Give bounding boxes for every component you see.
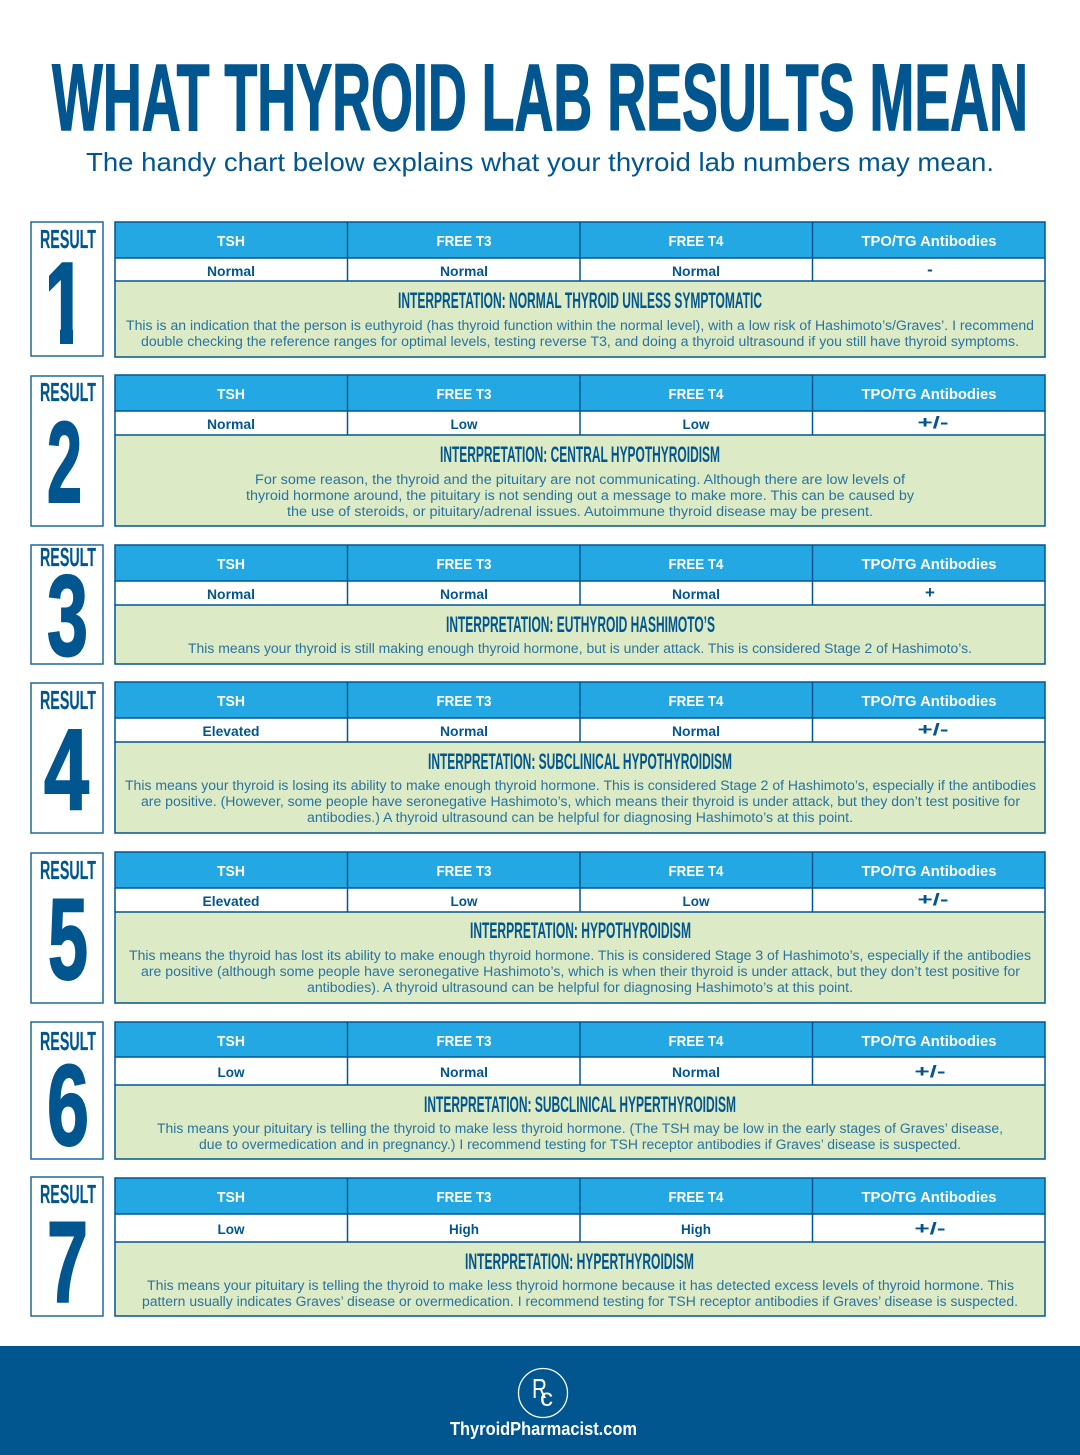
result 5 label: RESULT [40,855,96,885]
result 5 values row [115,888,1045,912]
result 5 header row: TPO/TG Antibodies [862,863,996,880]
result 6 header row: FREE T3 [436,1033,492,1050]
panel: result 4 [31,682,1045,834]
result 2 label: RESULT [40,377,96,407]
result 1 header row: FREE T4 [668,233,724,250]
result 4 header row [115,682,1045,742]
result 7 values row: High [681,1221,711,1237]
result 2 header row [115,375,1045,435]
result 7 interpretation: INTERPRETATION: HYPERTHYROIDISM [465,1249,694,1274]
result 1 interpretation: This is an indication that the person is euthyroid (has thyroid function within the normal level), with a low risk of Hashimoto’s/Graves’. I recommend [126,318,1034,333]
result 5 values row: Low [450,893,478,909]
result 1 values row [115,258,1045,281]
result 2 values row: Normal [207,416,255,432]
result 7 header row: TPO/TG Antibodies [862,1189,996,1206]
result 5 interpretation: antibodies). A thyroid ultrasound can be helpful for diagnosing Hashimoto’s at this point. [307,980,853,995]
result 3 label: 3 [47,552,88,680]
result 3 interpretation [115,605,1045,664]
result 1 values row: Normal [440,263,488,279]
result 2 interpretation: the use of steroids, or pituitary/adrenal issues. Autoimmune thyroid disease may be present. [287,504,873,519]
result 5 header row: FREE T4 [668,863,724,880]
result 1 header row [115,222,1045,281]
panel: result 7 [31,1177,1045,1327]
footer [0,1346,1080,1455]
result 2 values row [115,411,1045,435]
result 2 interpretation [115,435,1045,526]
result 1 values row: Normal [207,263,255,279]
result 1 interpretation: INTERPRETATION: NORMAL THYROID UNLESS SYMPTOMATIC [398,288,762,313]
result 3 header row: FREE T3 [436,556,492,573]
result 2 values row: Low [682,416,710,432]
result 2 label [31,376,103,527]
result 5 interpretation: are positive (although some people have seronegative Hashimoto’s, which is when their thyroid is under attack, but they don’t test positive for [141,964,1021,979]
panel: result 1 [31,222,1045,368]
result 5 values row: Elevated [202,893,260,909]
result 7 values row: +/- [914,1219,946,1238]
result 7 interpretation: This means your pituitary is telling the thyroid to make less thyroid hormone because it has detected excess levels of thyroid hormone. This [147,1278,1014,1293]
result 1 interpretation: double checking the reference ranges for optimal levels, testing reverse T3, and doing a thyroid ultrasound if you still have thyroid symptoms. [141,334,1019,349]
subtitle: The handy chart below explains what your thyroid lab numbers may mean. [86,147,994,177]
result 4 values row: Elevated [202,723,260,739]
result 5 label [31,853,103,1004]
result 4 header row: TSH [217,693,245,710]
result 4 label: RESULT [40,685,96,715]
result 4 interpretation: INTERPRETATION: SUBCLINICAL HYPOTHYROIDISM [428,749,732,774]
result 6 values row: Low [218,1064,245,1080]
panel: result 2 [31,375,1045,527]
result 4 label [31,683,103,834]
result 6 values row [115,1057,1045,1085]
result 2 header row: FREE T4 [668,386,724,403]
result 6 label: 6 [47,1042,89,1170]
result 6 label: RESULT [40,1026,96,1056]
result 1 label: 1 [45,240,85,368]
result 1 label: RESULT [40,224,96,254]
result 6 label [31,1022,103,1170]
result 7 label [31,1177,103,1327]
result 5 interpretation: INTERPRETATION: HYPOTHYROIDISM [470,918,691,943]
result 7 label: RESULT [40,1179,96,1209]
panel: result 6 [31,1022,1045,1170]
result 4 header row: FREE T3 [436,693,492,710]
result 5 values row: Low [682,893,710,909]
result 3 label: RESULT [40,542,96,572]
result 7 label: 7 [47,1199,88,1327]
result 6 values row: Normal [672,1064,720,1080]
result 4 values row: Normal [672,723,720,739]
result 1 values row: - [927,260,933,279]
panel: result 3 [31,542,1045,680]
result 7 header row: TSH [217,1189,245,1206]
result 2 values row: +/- [918,413,948,432]
result 1 interpretation [115,281,1045,357]
result 6 header row: TSH [217,1033,245,1050]
result 3 values row: Normal [672,586,720,602]
result 5 values row: +/- [918,890,948,909]
icon: RC logo: c [540,1384,553,1412]
result 7 values row: Low [218,1221,245,1237]
result 4 interpretation: antibodies.) A thyroid ultrasound can be helpful for diagnosing Hashimoto’s at this point. [307,810,853,825]
result 4 interpretation [115,742,1045,833]
result 3 values row: + [925,583,935,602]
result 7 header row: FREE T4 [668,1189,724,1206]
panel: result 5 [31,852,1045,1004]
result 2 interpretation: thyroid hormone around, the pituitary is not sending out a message to make more. This can be caused by [246,488,914,503]
result 2 label: 2 [47,399,82,527]
result 4 values row: Normal [440,723,488,739]
result 4 header row: TPO/TG Antibodies [862,693,996,710]
result 2 header row: FREE T3 [436,386,492,403]
result 2 interpretation: INTERPRETATION: CENTRAL HYPOTHYROIDISM [440,442,720,467]
result 1 header row: TPO/TG Antibodies [862,233,996,250]
result 3 values row: Normal [207,586,255,602]
result 6 values row: +/- [914,1062,946,1081]
result 7 values row: High [449,1221,479,1237]
result 4 label: 4 [44,706,89,834]
result 3 interpretation: INTERPRETATION: EUTHYROID HASHIMOTO’S [446,612,715,637]
website: ThyroidPharmacist.com [450,1419,637,1439]
result 4 interpretation: are positive. (However, some people have seronegative Hashimoto’s, which means their thyroid is under attack, but they don’t test positive for [141,794,1021,809]
result 5 header row [115,852,1045,912]
result 5 label: 5 [48,876,88,1004]
result 2 interpretation: For some reason, the thyroid and the pituitary are not communicating. Although there are low levels of [255,472,905,487]
result 2 header row: TPO/TG Antibodies [862,386,996,403]
result 1 label [31,222,103,368]
result 3 label [31,542,103,680]
result 6 values row: Normal [440,1064,488,1080]
result 5 interpretation [115,912,1045,1003]
result 3 header row: FREE T4 [668,556,724,573]
result 3 header row: TSH [217,556,245,573]
result 3 values row: Normal [440,586,488,602]
result 1 header row: TSH [217,233,245,250]
icon: RC logo: R [532,1373,547,1404]
result 3 header row [115,545,1045,605]
result 7 values row [115,1214,1045,1242]
result 2 values row: Low [450,416,478,432]
result 3 values row [115,581,1045,605]
result 1 header row: FREE T3 [436,233,492,250]
result 2 header row: TSH [217,386,245,403]
result 6 interpretation: INTERPRETATION: SUBCLINICAL HYPERTHYROIDISM [424,1092,736,1117]
result 3 interpretation: This means your thyroid is still making enough thyroid hormone, but is under attack. This is considered Stage 2 of Hashimoto’s. [188,641,972,656]
result 4 values row [115,718,1045,742]
result 5 interpretation: This means the thyroid has lost its ability to make enough thyroid hormone. This is considered Stage 3 of Hashimoto’s, especially if the antibodies [129,948,1031,963]
result 4 values row: +/- [918,720,948,739]
result 6 header row [115,1022,1045,1085]
result 7 interpretation: pattern usually indicates Graves’ disease or overmedication. I recommend testing for TSH receptor antibodies if Graves’ disease is suspected. [142,1294,1018,1309]
result 5 header row: TSH [217,863,245,880]
result 4 header row: FREE T4 [668,693,724,710]
result 3 header row: TPO/TG Antibodies [862,556,996,573]
result 6 header row: FREE T4 [668,1033,724,1050]
result 1 values row: Normal [672,263,720,279]
result 6 interpretation: This means your pituitary is telling the thyroid to make less thyroid hormone. (The TSH may be low in the early stages of Graves’ disease, [157,1121,1003,1136]
result 7 header row: FREE T3 [436,1189,492,1206]
icon: RC logo [518,1368,568,1418]
result 6 interpretation [115,1085,1045,1159]
result 4 interpretation: This means your thyroid is losing its ability to make enough thyroid hormone. This is considered Stage 2 of Hashimoto’s, especially if the antibodies [125,778,1036,793]
result 7 header row [115,1178,1045,1242]
result 6 interpretation: due to overmedication and in pregnancy.) I recommend testing for TSH receptor antibodies if Graves’ disease is suspected. [199,1137,961,1152]
result 5 header row: FREE T3 [436,863,492,880]
result 7 interpretation [115,1242,1045,1316]
result 6 header row: TPO/TG Antibodies [862,1033,996,1050]
